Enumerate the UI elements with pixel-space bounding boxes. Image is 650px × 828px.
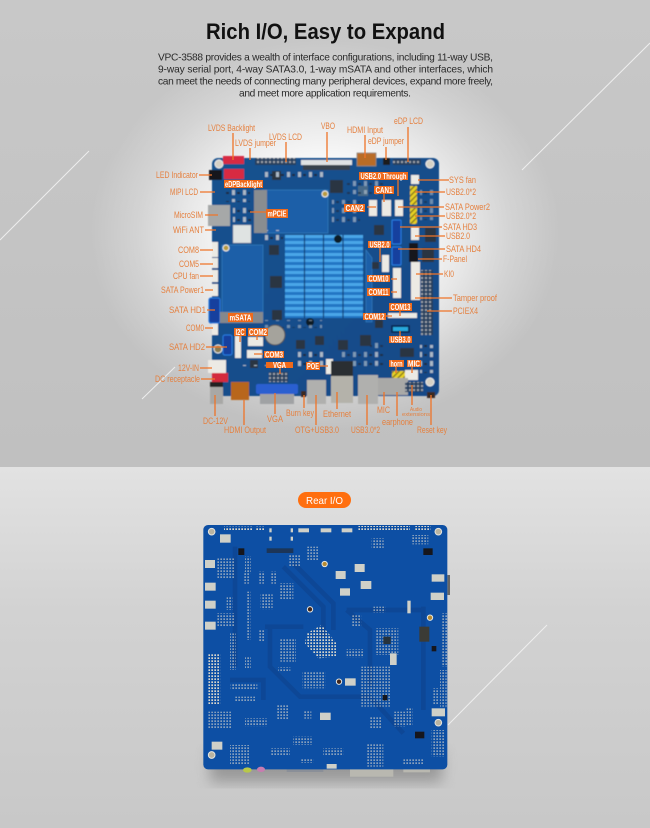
mounting holes xyxy=(214,160,434,386)
callout labels: left and top: DC receptacle xyxy=(155,374,200,384)
F-Panel header xyxy=(409,243,418,262)
callout labels: bottom: DC-12V xyxy=(203,416,229,426)
orange board tags: COM13 xyxy=(390,303,411,312)
VBO connector xyxy=(301,160,352,170)
SATA connectors xyxy=(209,220,401,355)
rear pcb base xyxy=(203,525,447,769)
callout labels: left and top: LED Indicator xyxy=(156,170,198,180)
audio jacks xyxy=(378,378,408,395)
callout labels: left and top: COM0 xyxy=(186,323,204,333)
rear pin fields xyxy=(208,526,431,705)
orange board tags: COM2 xyxy=(249,328,267,337)
callout labels: left and top: MicroSIM xyxy=(174,210,203,220)
callout labels: right and top right: KI0 xyxy=(444,269,454,279)
lighter blue ground panels xyxy=(222,190,372,322)
callout labels: bottom: earphone xyxy=(382,417,413,427)
battery xyxy=(265,325,285,345)
orange board tags: POE xyxy=(307,362,319,371)
orange board tags: mPCIE xyxy=(268,210,287,218)
description text: 9-way serial port, 4-way SATA3.0, 1-way mSATA and other interfaces, which xyxy=(158,64,493,76)
Ethernet port xyxy=(331,361,353,403)
audio jack stubs xyxy=(243,767,265,773)
orange board tags: horn xyxy=(390,359,403,368)
background: rear section xyxy=(0,467,650,828)
darker copper traces xyxy=(230,547,423,733)
callout labels: right and top right: USB2.0 xyxy=(446,231,470,241)
burn key xyxy=(301,391,306,397)
eDP jumper xyxy=(383,158,390,165)
PCIEX4 pins xyxy=(421,270,433,335)
description text xyxy=(158,52,493,100)
rear black chips xyxy=(238,548,436,738)
callout labels: left and top: SATA HD2 xyxy=(169,342,205,352)
orange board tags: USB2.0 xyxy=(370,240,390,249)
callout labels: left and top: COM8 xyxy=(178,245,199,255)
callout labels: left and top: SATA HD1 xyxy=(169,305,206,315)
LED indicator xyxy=(209,170,222,180)
rear component clusters xyxy=(208,535,448,767)
orange board tags: USB3.0 xyxy=(390,335,411,344)
right edge port xyxy=(447,575,450,595)
leader lines xyxy=(199,127,452,425)
callout labels: bottom: Reset key xyxy=(417,425,447,435)
rear white pads xyxy=(205,528,445,769)
small component clusters xyxy=(225,168,434,373)
background: top section xyxy=(0,0,650,467)
rear board photo xyxy=(203,525,450,777)
front board photo xyxy=(208,153,439,404)
callout labels: right and top right: F-Panel xyxy=(443,254,467,264)
callout labels: bottom: Audio xyxy=(410,407,422,413)
callout labels: right and top right: SYS fan xyxy=(449,175,476,185)
callout labels: bottom: Ethernet xyxy=(323,409,351,419)
orange board tags: COM12 xyxy=(364,312,385,321)
callout labels: bottom: HDMI Output xyxy=(224,425,266,435)
rear I/O pill heading xyxy=(298,492,351,508)
callout labels: bottom: MIC xyxy=(377,405,390,415)
callout labels: left and top: VBO xyxy=(321,121,335,131)
rear I/O pill heading: Rear I/O xyxy=(306,495,343,507)
callout labels: right and top right: HDMI Input xyxy=(347,125,383,135)
orange board tags xyxy=(224,172,421,371)
callout labels: right and top right: eDP jumper xyxy=(368,136,404,146)
description text: can meet the needs of connecting many peripheral devices, expand more freely, xyxy=(158,76,493,88)
callout labels: right and top right: USB2.0*2 xyxy=(446,211,476,221)
orange board tags: eDPBacklight xyxy=(225,180,262,189)
mSATA slot xyxy=(220,312,263,323)
rear mounting holes xyxy=(208,528,442,758)
red backlight connectors xyxy=(223,156,244,179)
orange board tags: mSATA xyxy=(230,314,252,322)
HDMI output xyxy=(231,382,249,400)
callout labels: bottom xyxy=(203,405,447,435)
callout labels: left and top: COM5 xyxy=(179,259,199,269)
orange board tags: MIC xyxy=(408,359,420,368)
LVDS LCD header xyxy=(255,158,296,165)
orange board tags: COM10 xyxy=(368,274,389,283)
HDMI input xyxy=(357,153,376,166)
callout labels: right and top right: SATA HD3 xyxy=(443,222,477,232)
callout labels: left and top: WiFi ANT xyxy=(173,225,204,235)
callout labels: left and top: LVDS Backlight xyxy=(208,123,255,133)
callout labels: bottom: extensions xyxy=(402,412,431,418)
description text: VPC-3588 provides a wealth of interface configurations, including 11-way USB, xyxy=(158,52,493,64)
WiFi module xyxy=(233,225,251,243)
mPCIE slot xyxy=(254,190,267,233)
callout labels: bottom: VGA xyxy=(267,414,284,424)
surface chips xyxy=(250,171,436,368)
heatsink xyxy=(285,235,363,326)
USB ports xyxy=(307,375,378,404)
orange board tags: I2C xyxy=(236,328,245,337)
callout labels: left and top: LVDS jumper xyxy=(235,138,276,148)
white connectors xyxy=(208,175,420,380)
callout labels: left and top: SATA Power1 xyxy=(161,285,204,295)
callout labels: bottom: Burn key xyxy=(286,408,314,418)
callout labels: right and top right xyxy=(347,116,497,316)
USB 3.0 port xyxy=(391,325,410,333)
DC jack xyxy=(210,382,223,404)
callout labels: right and top right: eDP LCD xyxy=(394,116,423,126)
callout labels: right and top right: PCIEX4 xyxy=(453,306,478,316)
callout labels: right and top right: USB2.0*2 xyxy=(446,187,476,197)
VGA port xyxy=(256,372,298,404)
orange board tags: COM11 xyxy=(368,288,389,297)
eDP LCD header xyxy=(393,159,421,165)
rear board shadow xyxy=(210,750,442,782)
bottom edge ports xyxy=(287,767,430,777)
audio extension header xyxy=(405,382,423,392)
pcb base xyxy=(212,158,439,396)
orange board tags: COM3 xyxy=(265,350,283,359)
MicroSIM slot xyxy=(208,205,230,226)
callout labels: left and top xyxy=(155,121,335,384)
description text: and meet more application requirements. xyxy=(239,88,411,100)
reset key xyxy=(427,392,435,398)
callout labels: left and top: 12V-IN xyxy=(178,363,199,373)
orange board tags: VGA xyxy=(273,361,286,370)
orange board tags: USB2.0 Through xyxy=(360,172,407,181)
callout labels: left and top: CPU fan xyxy=(173,271,199,281)
callout labels: bottom: USB3.0*2 xyxy=(351,425,380,435)
callout labels: bottom: OTG+USB3.0 xyxy=(295,425,339,435)
yellow USB headers xyxy=(392,186,417,379)
callout labels: right and top right: Tamper proof xyxy=(453,293,497,303)
title: Rich I/O, Easy to Expand xyxy=(206,19,445,44)
callout labels: left and top: LVDS LCD xyxy=(269,132,302,142)
orange board tags: CAN2 xyxy=(346,204,364,213)
orange board tags: CAN1 xyxy=(376,186,393,195)
callout labels: right and top right: SATA Power2 xyxy=(445,202,490,212)
DC receptacle xyxy=(212,373,228,382)
callout labels: right and top right: SATA HD4 xyxy=(446,244,481,254)
callout labels: left and top: MIPI LCD xyxy=(170,187,198,197)
central BGA cluster xyxy=(305,625,337,658)
